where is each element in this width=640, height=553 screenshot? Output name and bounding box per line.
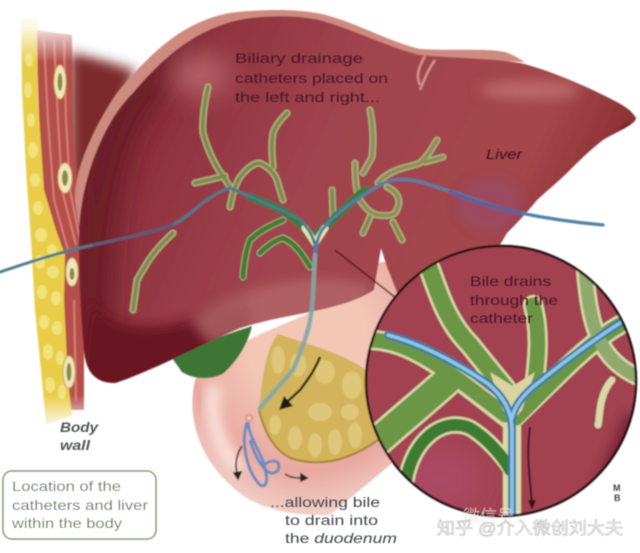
- pointer line to inset: [335, 250, 396, 298]
- artist signature: B: [614, 493, 621, 503]
- fades of the wall: [10, 0, 145, 62]
- callout: location of the catheters: catheters and liver: [12, 497, 148, 513]
- body wall: [10, 0, 145, 430]
- watermark: [437, 507, 623, 538]
- left catheter: [0, 188, 315, 272]
- fat layer: [21, 18, 72, 425]
- liver shading: [70, 30, 630, 395]
- muscle layer: [36, 30, 84, 410]
- duodenum: [192, 262, 420, 515]
- inset arrow: [528, 427, 532, 503]
- artist signature: [613, 483, 621, 503]
- arrow: bile flow to duodenum: [279, 357, 320, 410]
- label: biliary drainage catheters: [235, 50, 388, 105]
- inset ducts green: [368, 262, 640, 490]
- label: allowing bile to drain into the duodenum: [270, 494, 397, 546]
- callout: location of the catheters: Location of the: [12, 478, 121, 494]
- inset ducts cream edge: [368, 262, 640, 520]
- inset catheter: [388, 323, 620, 515]
- callout: location of the catheters: [3, 471, 156, 539]
- inset duct junction: [490, 372, 535, 422]
- catheter left and right: [0, 179, 603, 408]
- label: biliary drainage catheters: Biliary drainage: [235, 50, 363, 66]
- small arrows at duodenum: [234, 446, 307, 481]
- artist signature: M: [613, 483, 620, 493]
- label: body wall: Body: [60, 419, 99, 435]
- label: bile drains through the catheter: through the: [470, 292, 558, 308]
- inset shading: [592, 410, 632, 478]
- label: biliary drainage catheters: the left and right...: [235, 89, 380, 105]
- common catheter: [260, 255, 315, 408]
- inset circle: [366, 246, 640, 520]
- label: biliary drainage catheters: catheters placed on: [235, 70, 388, 86]
- coiled catheter tip: [244, 415, 279, 486]
- label: bile drains through the catheter: catheter: [470, 310, 533, 326]
- label: allowing bile to drain into the duodenum: to drain into: [285, 512, 378, 528]
- rib ovals: [54, 65, 78, 388]
- label: liver: Liver: [486, 146, 524, 162]
- label: bile drains through the catheter: Bile drains: [470, 273, 551, 289]
- liver: [70, 10, 636, 395]
- callout: location of the catheters: within the body: [11, 515, 122, 531]
- right catheter: [315, 179, 603, 262]
- label: allowing bile to drain into the duodenum: the duodenum: [285, 530, 397, 546]
- inset border: [366, 246, 636, 516]
- liver body: [79, 16, 636, 383]
- label: body wall: [60, 419, 99, 453]
- hole between ducts: [392, 298, 420, 328]
- label: allowing bile to drain into the duodenum: ...allowing bile: [270, 494, 380, 510]
- watermark: 知乎 @介入微创刘大夫: [437, 519, 623, 538]
- label: bile drains through the catheter: [470, 273, 558, 326]
- dark tissue behind the liver: [70, 50, 135, 200]
- gallbladder: [172, 326, 252, 378]
- pancreas: [259, 334, 378, 462]
- label: body wall: wall: [60, 437, 91, 453]
- watermark: 微信号：: [463, 507, 531, 526]
- bile ducts in liver: [133, 87, 443, 310]
- capsule rim: [75, 10, 525, 240]
